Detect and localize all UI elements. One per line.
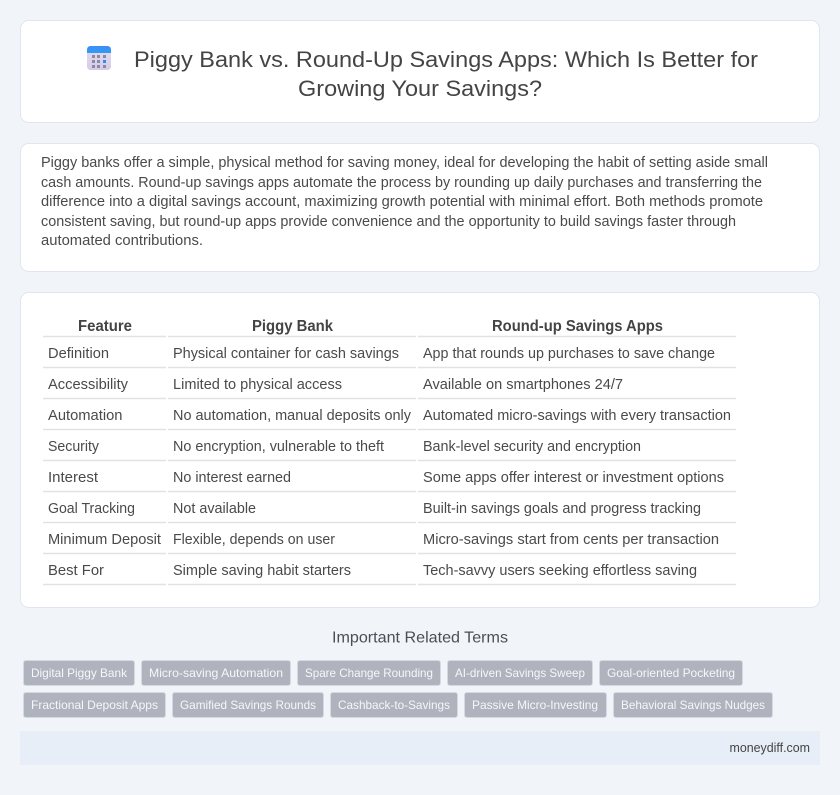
row: automation: Automation xyxy=(48,408,122,424)
tag: Fractional Deposit Apps: Fractional Deposit Apps xyxy=(31,698,158,712)
row: security: No encryption, vulnerable to theft xyxy=(173,439,384,455)
row: security xyxy=(48,439,641,455)
tag: Behavioral Savings Nudges: Behavioral Savings Nudges xyxy=(621,698,765,712)
panel: header xyxy=(20,20,820,122)
tag: Digital Piggy Bank: Digital Piggy Bank xyxy=(31,666,128,680)
intro paragraph: consistent saving, but round-up apps provide convenience and the opportunity to build savings faster through xyxy=(41,214,736,230)
panel: introduction xyxy=(20,144,820,272)
tag: Cashback-to-Savings: Cashback-to-Savings xyxy=(338,698,450,712)
intro paragraph: Piggy banks offer a simple, physical method for saving money, ideal for developing the habit of setting aside small xyxy=(41,155,768,171)
row: minimum deposit xyxy=(48,532,719,548)
tag: Gamified Savings Rounds xyxy=(172,692,324,718)
row: interest: No interest earned xyxy=(173,470,291,486)
panel: comparison table xyxy=(20,292,820,608)
tag: Goal-oriented Pocketing: Goal-oriented Pocketing xyxy=(607,666,735,680)
table header: Piggy Bank xyxy=(252,318,333,335)
intro paragraph: difference into a digital savings account, maximizing growth potential with minimal effort. Both methods promote xyxy=(41,194,763,210)
row: interest: Some apps offer interest or investment options xyxy=(423,470,724,486)
row: goal tracking: Built-in savings goals and progress tracking xyxy=(423,501,701,517)
row: accessibility: Limited to physical access xyxy=(173,377,342,393)
row: definition: App that rounds up purchases to save change xyxy=(423,346,715,362)
row: goal tracking: Goal Tracking xyxy=(48,501,135,517)
row: automation xyxy=(48,408,731,424)
row: interest xyxy=(48,470,724,486)
icon: calendar xyxy=(87,46,111,70)
tag: Micro-saving Automation: Micro-saving Automation xyxy=(149,666,283,680)
row: best for: Best For xyxy=(48,563,104,579)
footer: moneydiff.com xyxy=(730,741,810,755)
tag: Goal-oriented Pocketing xyxy=(600,660,742,686)
tag: AI-driven Savings Sweep xyxy=(448,660,592,686)
table header: Feature xyxy=(78,318,132,335)
title: Growing Your Savings? xyxy=(298,76,542,101)
tag: Cashback-to-Savings xyxy=(330,692,458,718)
table header: Round-up Savings Apps xyxy=(492,318,663,335)
tag: Spare Change Rounding xyxy=(298,660,440,686)
row: minimum deposit: Minimum Deposit xyxy=(48,532,161,548)
row: best for: Simple saving habit starters xyxy=(173,563,351,579)
intro paragraph: automated contributions. xyxy=(41,233,203,249)
row: definition: Definition xyxy=(48,346,109,362)
title xyxy=(134,47,759,101)
title: Piggy Bank vs. Round-Up Savings Apps: Which Is Better for xyxy=(134,47,759,72)
intro paragraph xyxy=(41,155,768,249)
table header xyxy=(78,318,663,335)
tag: Gamified Savings Rounds: Gamified Savings Rounds xyxy=(180,698,316,712)
tag: Micro-saving Automation xyxy=(142,660,290,686)
row: definition: Physical container for cash savings xyxy=(173,346,399,362)
tag: Spare Change Rounding: Spare Change Rounding xyxy=(305,666,433,680)
row: accessibility: Available on smartphones 24/7 xyxy=(423,377,623,393)
row: accessibility xyxy=(48,377,623,393)
row: automation: Automated micro-savings with every transaction xyxy=(423,408,731,424)
row: automation: No automation, manual deposits only xyxy=(173,408,412,424)
row: accessibility: Accessibility xyxy=(48,377,129,393)
row: goal tracking: Not available xyxy=(173,501,256,517)
row: definition xyxy=(48,346,715,362)
row: security: Bank-level security and encryption xyxy=(423,439,641,455)
related term tags xyxy=(24,660,772,718)
tag: AI-driven Savings Sweep: AI-driven Savings Sweep xyxy=(455,666,585,680)
tag: Passive Micro-Investing: Passive Micro-Investing xyxy=(472,698,598,712)
row: minimum deposit: Flexible, depends on user xyxy=(173,532,335,548)
row: goal tracking xyxy=(48,501,701,517)
row: interest: Interest xyxy=(48,470,98,486)
tag: Digital Piggy Bank xyxy=(24,660,134,686)
tag: Fractional Deposit Apps xyxy=(24,692,166,718)
footer xyxy=(20,731,820,765)
row: minimum deposit: Micro-savings start from cents per transaction xyxy=(423,532,719,548)
row: best for: Tech-savvy users seeking effortless saving xyxy=(423,563,697,579)
tag: Passive Micro-Investing xyxy=(464,692,606,718)
heading: related terms: Important Related Terms xyxy=(332,630,508,646)
row: security: Security xyxy=(48,439,100,455)
intro paragraph: cash amounts. Round-up savings apps automate the process by rounding up daily purchases and transferring the xyxy=(41,175,762,191)
tag: Behavioral Savings Nudges xyxy=(614,692,772,718)
row: best for xyxy=(48,563,697,579)
